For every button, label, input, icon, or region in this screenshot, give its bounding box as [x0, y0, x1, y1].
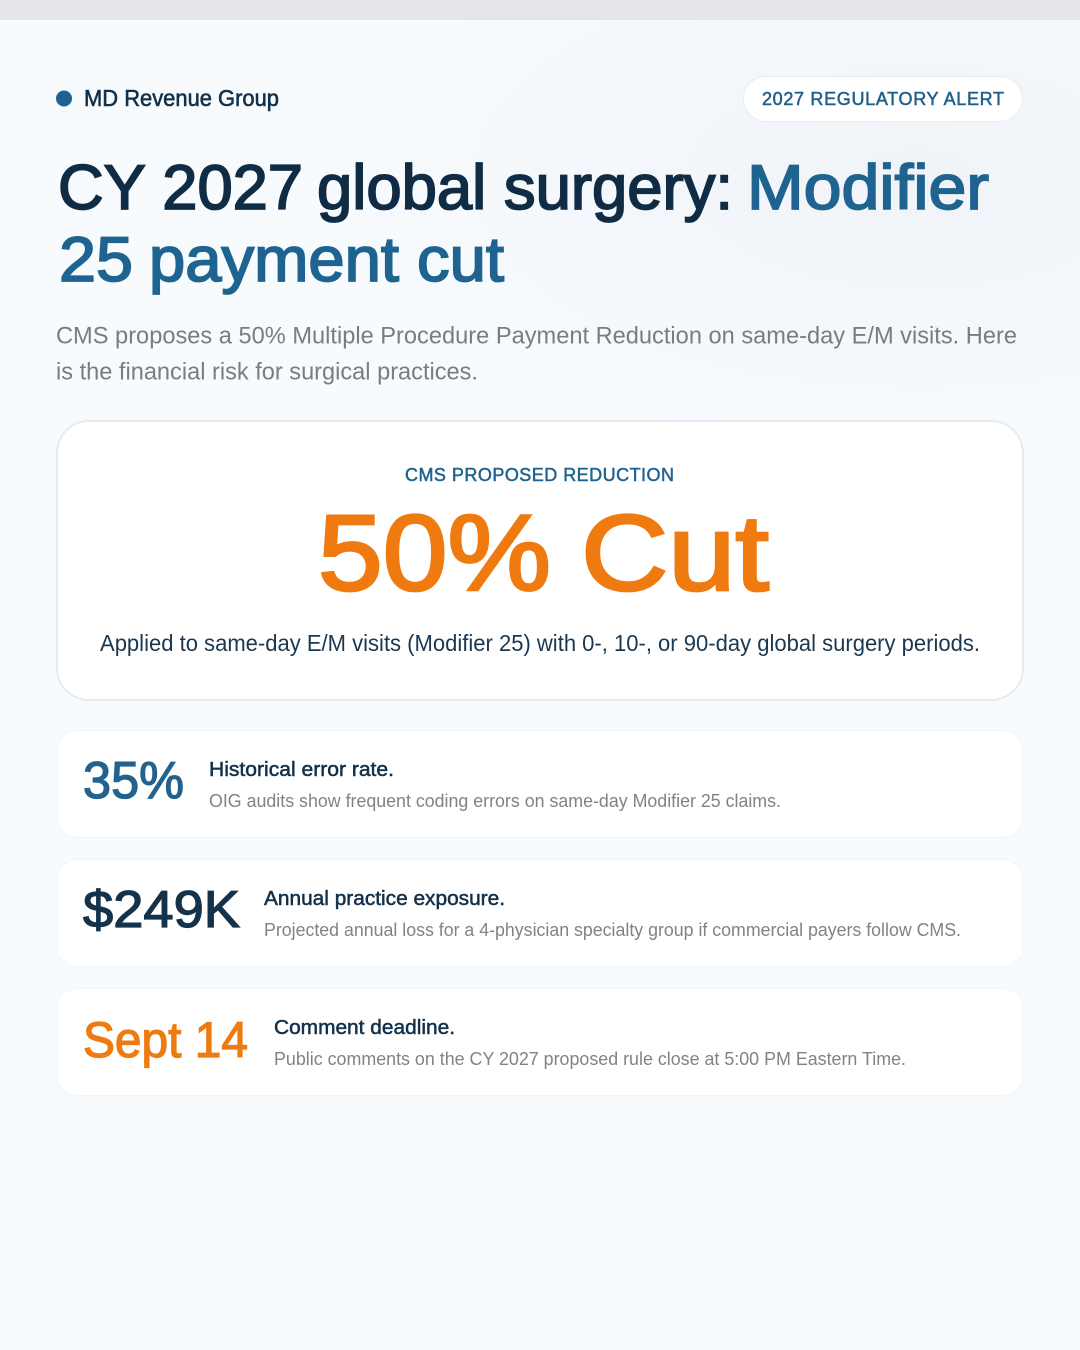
panel: historical error rate	[57, 730, 1023, 838]
hero number: 50%	[318, 492, 551, 613]
title: CY 2027	[58, 153, 303, 223]
panel: annual practice exposure	[57, 860, 1023, 966]
stat description: OIG audits show frequent coding errors on same-day Modifier 25 claims.	[209, 791, 781, 811]
badge: regulatory alert: 2027 REGULATORY ALERT	[762, 89, 1004, 109]
stat heading: Comment deadline.	[274, 1017, 455, 1039]
stat description: Projected annual loss for a 4-physician specialty group if commercial payers follow CMS.	[264, 920, 961, 940]
title: Modifier	[747, 153, 989, 223]
title: 25	[59, 225, 133, 295]
subtitle	[56, 322, 1017, 386]
title	[58, 153, 989, 295]
title: global surgery:	[317, 153, 733, 223]
title: payment cut	[149, 225, 505, 295]
brand name: MD Revenue Group	[84, 85, 279, 111]
header: brand	[56, 85, 279, 111]
panel: comment deadline	[57, 988, 1023, 1096]
stat: Sept 14: Sept 14	[83, 1012, 248, 1068]
icon: brand dot	[56, 90, 72, 106]
hero description: Applied to same-day E/M visits (Modifier 25) with 0-, 10-, or 90-day global surgery periods.	[100, 630, 980, 656]
panel: 50% cut hero	[57, 421, 1023, 700]
hero label: CMS PROPOSED REDUCTION	[405, 465, 674, 485]
subtitle: is the financial risk for surgical practices.	[56, 358, 478, 386]
stat: $249K: $249K	[83, 881, 240, 939]
stat heading: Historical error rate.	[209, 759, 394, 781]
stat: 35%: 35%	[83, 752, 184, 810]
badge: regulatory alert	[744, 76, 1022, 122]
stat description: Public comments on the CY 2027 proposed rule close at 5:00 PM Eastern Time.	[274, 1049, 906, 1069]
hero number	[318, 492, 769, 613]
stat heading: Annual practice exposure.	[264, 888, 505, 910]
hero number: Cut	[581, 492, 769, 613]
subtitle: CMS proposes a 50% Multiple Procedure Payment Reduction on same-day E/M visits. Here	[56, 322, 1017, 350]
